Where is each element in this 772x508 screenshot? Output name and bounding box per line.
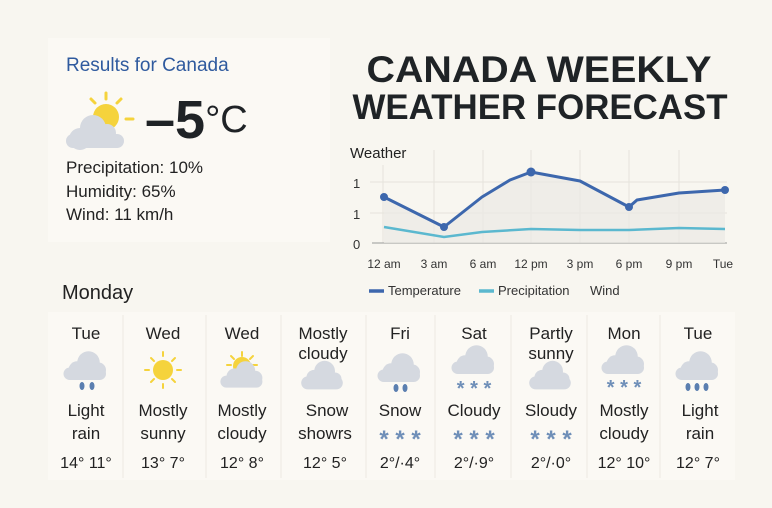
- icon: sun wed: [145, 352, 181, 388]
- card labels: Fri: [390, 324, 410, 343]
- card descriptions: [68, 401, 719, 443]
- legend: [369, 283, 620, 298]
- card descriptions: sunny: [140, 424, 186, 443]
- card labels: [72, 324, 712, 363]
- snow rows: * * *: [379, 426, 421, 453]
- title: [352, 49, 728, 127]
- card descriptions: cloudy: [599, 424, 649, 443]
- card descriptions: Mostly: [599, 401, 649, 420]
- panel: forecast cards: * * *: [607, 377, 641, 399]
- card descriptions: Cloudy: [448, 401, 501, 420]
- title: CANADA WEEKLY: [366, 49, 712, 90]
- heading: monday: Monday: [62, 282, 133, 304]
- snow rows: [379, 426, 572, 453]
- card temperatures: 13° 7°: [141, 455, 185, 472]
- card temperatures: [60, 455, 720, 472]
- chart: weather line chart: 3 pm: [567, 257, 593, 271]
- temperature: °C: [205, 99, 248, 141]
- panel: current conditions: [48, 38, 330, 242]
- card temperatures: 14° 11°: [60, 455, 112, 472]
- details text: Precipitation: 10%: [66, 158, 203, 177]
- card labels: Tue: [72, 324, 100, 343]
- chart: weather line chart: 9 pm: [666, 257, 692, 271]
- card temperatures: 12° 7°: [676, 455, 720, 472]
- card descriptions: Mostly: [217, 401, 267, 420]
- card labels: Tue: [684, 324, 712, 343]
- heading: results for canada: Results for Canada: [66, 55, 229, 76]
- card descriptions: rain: [72, 424, 100, 443]
- card temperatures: 12° 10°: [598, 455, 650, 472]
- card descriptions: Sloudy: [525, 401, 577, 420]
- details text: [66, 158, 203, 224]
- card labels: Wed: [146, 324, 180, 343]
- card descriptions: Mostly: [138, 401, 188, 420]
- card temperatures: 2°/·9°: [454, 455, 494, 472]
- card labels: Sat: [461, 324, 487, 343]
- temperature: –5: [145, 90, 205, 150]
- card descriptions: Light: [68, 401, 105, 420]
- card temperatures: 12° 5°: [303, 455, 347, 472]
- card labels: Partly: [529, 324, 573, 343]
- card descriptions: Light: [682, 401, 719, 420]
- icon: sun behind cloud: [66, 93, 133, 150]
- icon: cloud mostly cloudy: [301, 361, 343, 389]
- card temperatures: 12° 8°: [220, 455, 264, 472]
- card labels: cloudy: [298, 344, 348, 363]
- icon: cloud partly sunny: [529, 361, 571, 389]
- details text: Wind: 11 km/h: [66, 205, 173, 224]
- card temperatures: 2°/·4°: [380, 455, 420, 472]
- icon: sun cloud wed: [220, 352, 262, 388]
- legend: Wind: [590, 283, 620, 298]
- card labels: Wed: [225, 324, 259, 343]
- card descriptions: showrs: [298, 424, 352, 443]
- chart: weather line chart: 1: [353, 176, 360, 191]
- chart: weather line chart: 3 am: [421, 257, 447, 271]
- card descriptions: Snow: [306, 401, 349, 420]
- icon: cloud snow mon: [602, 345, 644, 374]
- card labels: sunny: [528, 344, 574, 363]
- card labels: Mon: [607, 324, 641, 343]
- legend: Precipitation: [498, 283, 570, 298]
- card descriptions: rain: [686, 424, 714, 443]
- chart: weather line chart: 6 am: [470, 257, 496, 271]
- card descriptions: cloudy: [217, 424, 267, 443]
- panel: forecast cards: [48, 312, 735, 480]
- chart: weather line chart: 12 pm: [514, 257, 548, 271]
- icon: cloud snow sat: [452, 345, 494, 374]
- chart: weather line chart: 6 pm: [616, 257, 642, 271]
- chart: weather line chart: 1: [353, 207, 360, 222]
- chart: weather line chart: Weather: [350, 145, 406, 162]
- snow rows: * * *: [530, 426, 572, 453]
- icon: cloud rain tue: [64, 351, 106, 380]
- legend: Temperature: [388, 283, 461, 298]
- chart: weather line chart: Tue: [713, 257, 733, 271]
- icon: cloud rain fri: [378, 353, 420, 382]
- chart: weather line chart: 0: [353, 237, 360, 252]
- chart: weather line chart: [350, 145, 733, 298]
- icon: cloud rain tue 2: [676, 351, 718, 380]
- details text: Humidity: 65%: [66, 182, 176, 201]
- card descriptions: Snow: [379, 401, 422, 420]
- chart: weather line chart: 12 am: [367, 257, 401, 271]
- title: WEATHER FORECAST: [352, 88, 728, 127]
- snow rows: * * *: [453, 426, 495, 453]
- card labels: Mostly: [298, 324, 348, 343]
- panel: forecast cards: * * *: [457, 378, 491, 400]
- card temperatures: 2°/·0°: [531, 455, 571, 472]
